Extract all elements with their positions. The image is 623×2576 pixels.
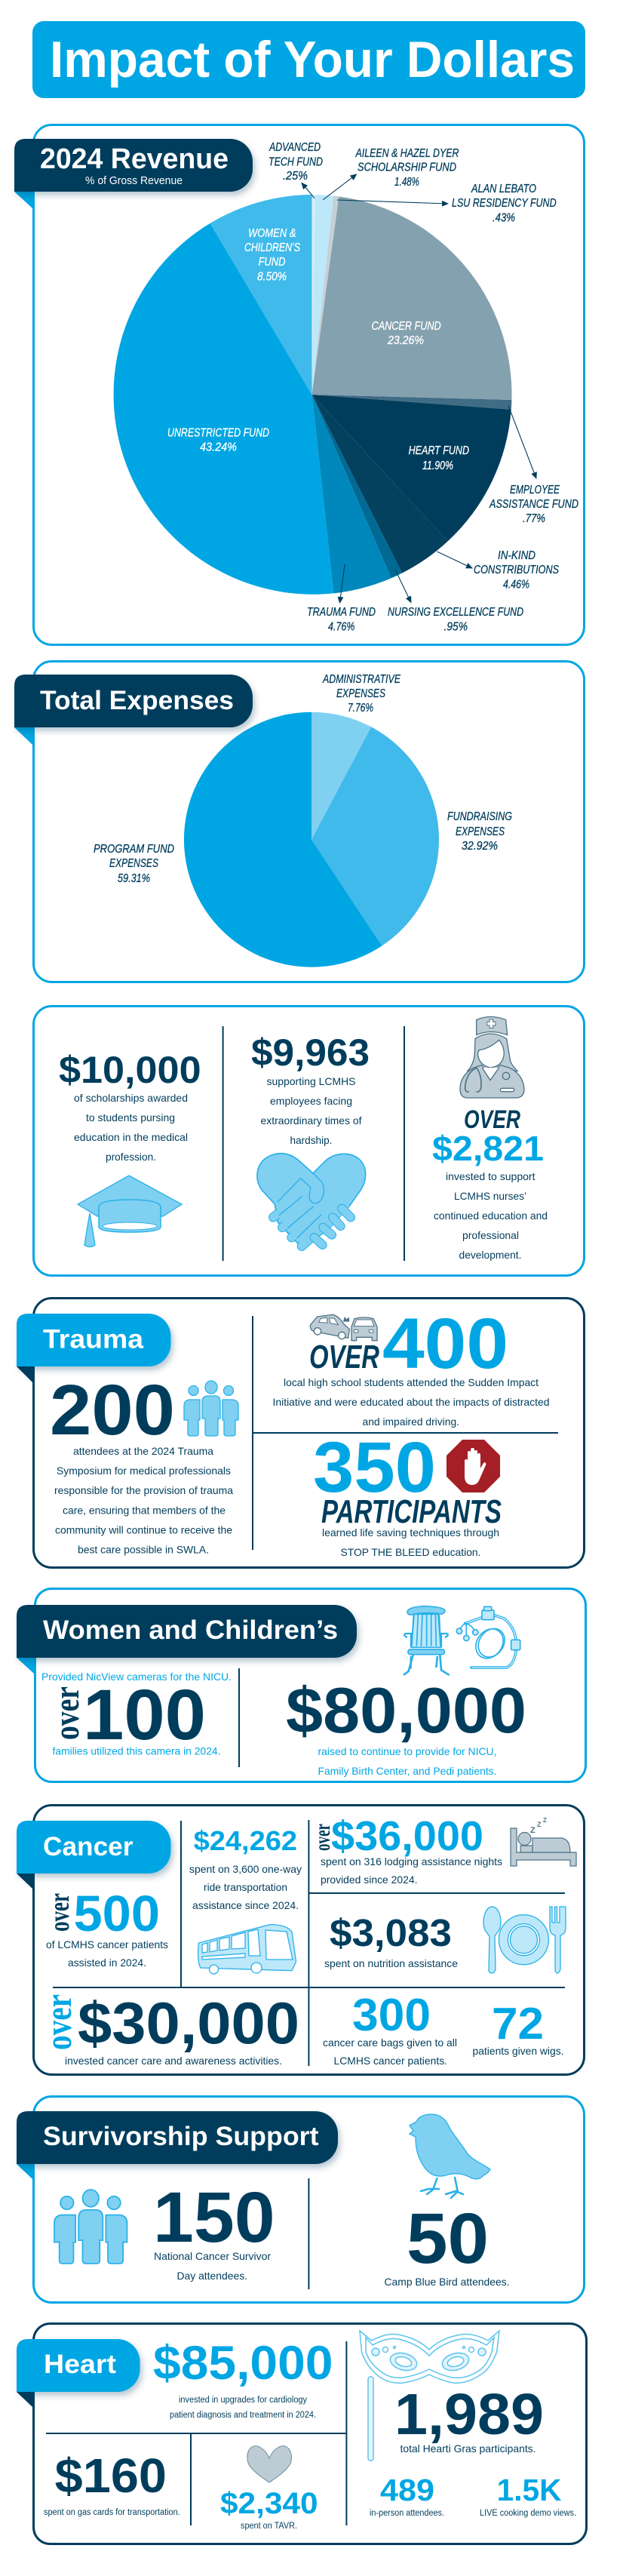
pie labels outside with arrows: ASSISTANCE FUND <box>489 498 578 511</box>
pie labels outside with arrows: TRAUMA FUND <box>307 606 376 619</box>
stat: 489 attendees <box>370 2473 444 2518</box>
stat: 50 camp attendees <box>385 2199 510 2288</box>
stat: 1.5K views <box>480 2473 576 2518</box>
stat: $85,000 upgrades: patient diagnosis and treatment in 2024. <box>170 2411 316 2420</box>
stat: over $36,000 lodging: provided since 2024. <box>321 1874 418 1886</box>
pie labels outside with arrows: ADVANCED <box>269 141 321 154</box>
pie labels outside with arrows: 4.76% <box>328 621 354 634</box>
stat: over $36,000 lodging: over <box>310 1824 335 1851</box>
pie labels: expenses: EXPENSES <box>456 825 505 838</box>
stat: 350 participants: learned life saving techniques through <box>322 1526 499 1539</box>
stat: $9,963 employees: hardship. <box>290 1134 332 1146</box>
panel: scholarships, employees and nurses <box>33 1007 584 1275</box>
icon: person sleeping in bed: Z <box>543 1817 547 1824</box>
stat: 489 attendees: in-person attendees. <box>370 2509 444 2518</box>
pie labels inside slices: 43.24% <box>200 441 237 454</box>
stat: over 100 families: families utilized this camera in 2024. <box>53 1745 220 1757</box>
pie labels outside with arrows: AILEEN & HAZEL DYER <box>355 147 459 160</box>
panel: 2024 revenue <box>14 125 584 644</box>
stat: $24,262 transportation: $24,262 <box>194 1825 297 1856</box>
stat: 1,989 participants: total Hearti Gras participants. <box>400 2442 536 2455</box>
stat: 200 attendees: community will continue to receive the <box>55 1524 232 1536</box>
stat: over 100 families: 100 <box>83 1675 206 1755</box>
stat: $80,000 raised: raised to continue to provide for NICU, <box>318 1745 496 1757</box>
stat: $80,000 raised <box>286 1675 526 1777</box>
stat: $2,340 TAVR: $2,340 <box>220 2487 318 2520</box>
pie labels: expenses: EXPENSES <box>109 857 158 870</box>
stat: over $30,000 invested <box>37 1990 299 2067</box>
pie labels outside with arrows: LSU RESIDENCY FUND <box>452 197 557 210</box>
pie labels inside slices: 8.50% <box>257 270 287 284</box>
heading: Total Expenses <box>14 675 253 745</box>
stat: 200 attendees: 200 <box>50 1370 175 1450</box>
pie labels: expenses: PROGRAM FUND <box>94 843 174 856</box>
stat: $3,083 nutrition: $3,083 <box>330 1911 452 1954</box>
stat: 350 participants: 350 <box>313 1428 436 1508</box>
stat: $10,000 scholarships: to students pursing <box>86 1111 175 1124</box>
stat: 150 attendees: 150 <box>153 2178 275 2258</box>
pie labels inside slices: UNRESTRICTED FUND <box>167 427 269 440</box>
stat: $3,083 nutrition: spent on nutrition assistance <box>324 1957 458 1969</box>
stat: $2,340 TAVR: spent on TAVR. <box>241 2522 297 2531</box>
stat: $24,262 transportation <box>189 1825 302 1911</box>
stat: 300 care bags: cancer care bags given to all <box>323 2037 457 2049</box>
stat: $9,963 employees: employees facing <box>270 1095 352 1107</box>
heading: Survivorship Support: Survivorship Support <box>43 2122 319 2151</box>
icon: person sleeping in bed <box>511 1817 576 1866</box>
stat: $80,000 raised: $80,000 <box>286 1675 526 1747</box>
stat: $9,963 employees: extraordinary times of <box>261 1114 362 1127</box>
stat: over 400 students <box>273 1304 549 1428</box>
title banner <box>32 21 585 98</box>
stat: over $2,821 nurses: $2,821 <box>432 1129 544 1168</box>
pie labels inside slices: HEART FUND <box>409 444 469 457</box>
pie labels inside slices: CHILDREN’S <box>244 241 300 254</box>
icon: group of survivors <box>54 2190 127 2264</box>
pie labels outside with arrows <box>269 141 578 634</box>
icon: car crash <box>310 1314 377 1341</box>
stat: $160 gas cards: $160 <box>55 2448 167 2503</box>
stat: 200 attendees: attendees at the 2024 Trauma <box>73 1445 213 1457</box>
pie labels outside with arrows: SCHOLARSHIP FUND <box>358 161 456 174</box>
icon: plate and cutlery <box>483 1907 566 1973</box>
pie labels outside with arrows: .25% <box>283 170 308 183</box>
pie labels outside with arrows: .77% <box>523 512 545 525</box>
stat: over $30,000 invested: invested cancer care and awareness activities. <box>65 2055 282 2067</box>
stat: 72 wigs <box>472 1999 564 2057</box>
stat: over $2,821 nurses: OVER <box>464 1105 520 1134</box>
stat: 1.5K views: LIVE cooking demo views. <box>480 2509 576 2518</box>
stat: over 500 patients: of LCMHS cancer patients <box>46 1938 168 1950</box>
stat: $80,000 raised: Family Birth Center, and Pedi patients. <box>318 1765 496 1777</box>
icon: person sleeping in bed: Z <box>537 1821 542 1828</box>
stat: $24,262 transportation: spent on 3,600 one-way <box>189 1863 302 1875</box>
stat: 150 attendees: Day attendees. <box>176 2270 247 2282</box>
pie labels: expenses: 7.76% <box>348 702 373 715</box>
stat: $10,000 scholarships <box>59 1049 201 1163</box>
pie labels outside with arrows: TECH FUND <box>269 155 323 168</box>
stat: 300 care bags: LCMHS cancer patients. <box>333 2055 447 2067</box>
stat: $160 gas cards: spent on gas cards for transportation. <box>44 2508 180 2517</box>
pie labels inside slices: FUND <box>258 256 286 269</box>
heading: Trauma: Trauma <box>43 1325 144 1354</box>
panel: cancer <box>17 1805 584 2075</box>
stat: 200 attendees: best care possible in SWLA. <box>78 1544 209 1556</box>
stat: over $2,821 nurses <box>432 1105 548 1261</box>
panel: survivorship support <box>17 2096 584 2303</box>
stat: 350 participants: PARTICIPANTS <box>321 1493 502 1530</box>
panel: women and children's <box>17 1589 585 1782</box>
pie labels: expenses: EXPENSES <box>336 687 385 700</box>
heading: 2024 Revenue: 2024 Revenue <box>40 143 229 175</box>
pie labels: expenses <box>94 673 512 885</box>
stat: $10,000 scholarships: education in the medical <box>74 1131 188 1143</box>
heading: Cancer: Cancer <box>43 1832 134 1861</box>
stat: 200 attendees: responsible for the provision of trauma <box>54 1484 233 1496</box>
stat: over 100 families <box>41 1671 232 1757</box>
stat: over $2,821 nurses: LCMHS nurses’ <box>454 1190 526 1202</box>
heading: Cancer <box>17 1821 170 1889</box>
pie labels inside slices: WOMEN & <box>248 227 296 240</box>
heading: Survivorship Support <box>17 2111 338 2179</box>
title: Impact of Your Dollars <box>50 31 575 88</box>
pie labels: expenses: FUNDRAISING <box>447 810 512 823</box>
pie labels outside with arrows: CONSTRIBUTIONS <box>474 564 559 576</box>
stat: over 500 patients: 500 <box>74 1886 160 1942</box>
stat: $85,000 upgrades: $85,000 <box>153 2337 333 2390</box>
panel: total expenses <box>14 661 584 982</box>
heading: Total Expenses: Total Expenses <box>40 686 234 715</box>
stat: $10,000 scholarships: profession. <box>106 1151 156 1163</box>
icon: baby mobile <box>456 1606 520 1668</box>
icon: stop sign with hand <box>447 1440 500 1492</box>
stat: $24,262 transportation: assistance since 2024. <box>192 1899 299 1911</box>
pie labels outside with arrows: .95% <box>443 621 468 634</box>
pie labels inside slices: CANCER FUND <box>372 320 441 333</box>
stat: $10,000 scholarships: of scholarships awarded <box>74 1092 188 1104</box>
stat: over $2,821 nurses: continued education and <box>434 1210 548 1222</box>
pie labels outside with arrows: EMPLOYEE <box>510 484 560 496</box>
pie labels outside with arrows: .43% <box>493 211 515 225</box>
stat: over 500 patients: over <box>44 1893 75 1932</box>
stat: over $2,821 nurses: development. <box>459 1249 522 1261</box>
pie labels inside slices: 23.26% <box>387 334 424 347</box>
icon: mardi gras mask <box>360 2331 499 2461</box>
stat: 50 camp attendees: 50 <box>407 2199 489 2279</box>
icon: handshake heart <box>257 1154 366 1247</box>
pie labels inside slices: 11.90% <box>422 460 453 472</box>
pie labels inside slices <box>167 227 469 472</box>
stat: over 100 families: Provided NicView cameras for the NICU. <box>41 1671 232 1683</box>
stat: over 500 patients: assisted in 2024. <box>68 1957 146 1969</box>
stat: 1,989 participants: 1,989 <box>394 2382 544 2447</box>
stat: over $36,000 lodging: spent on 316 lodging assistance nights <box>321 1855 502 1867</box>
stat: over $2,821 nurses: professional <box>462 1229 519 1241</box>
icon: graduation cap <box>78 1176 182 1247</box>
stat: over 100 families: over <box>47 1686 87 1740</box>
icon: person sleeping in bed: Z <box>530 1826 536 1835</box>
icon: grey heart <box>247 2446 291 2482</box>
icon: group of people <box>184 1381 238 1436</box>
stat: $9,963 employees <box>251 1031 370 1146</box>
stat: over $30,000 invested: $30,000 <box>78 1990 299 2056</box>
stat: $24,262 transportation: ride transportation <box>204 1881 287 1893</box>
stat: 350 participants: STOP THE BLEED education. <box>341 1546 481 1558</box>
stat: $9,963 employees: supporting LCMHS <box>267 1075 356 1087</box>
stat: $9,963 employees: $9,963 <box>251 1031 370 1074</box>
pie labels outside with arrows: IN-KIND <box>498 549 536 562</box>
stat: 150 attendees: National Cancer Survivor <box>154 2250 271 2262</box>
heading: Women and Children's <box>17 1605 357 1674</box>
stat: over $2,821 nurses: invested to support <box>446 1170 536 1182</box>
heading: Trauma <box>17 1314 170 1382</box>
icon: blue bird <box>410 2114 490 2198</box>
pie labels: expenses: ADMINISTRATIVE <box>322 673 400 686</box>
panel: heart <box>17 2324 587 2544</box>
stat: over 400 students: 400 <box>382 1304 508 1384</box>
stat: 200 attendees: Symposium for medical professionals <box>57 1465 231 1477</box>
stat: 72 wigs: 72 <box>492 1999 544 2049</box>
stat: $85,000 upgrades <box>153 2337 333 2420</box>
stat: over $36,000 lodging <box>310 1812 502 1886</box>
stat: 200 attendees: care, ensuring that members of the <box>63 1505 226 1517</box>
pie labels outside with arrows: 1.48% <box>394 176 419 189</box>
stat: over 400 students: Initiative and were educated about the impacts of distracted <box>273 1396 549 1408</box>
stat: 489 attendees: 489 <box>380 2473 434 2507</box>
icon: rocking chair <box>404 1606 450 1675</box>
stat: $160 gas cards <box>44 2448 180 2517</box>
panel: trauma <box>17 1298 584 1568</box>
heading: Women and Children's: Women and Children’s <box>43 1615 338 1645</box>
pie labels outside with arrows: 4.46% <box>503 578 529 592</box>
pie labels: expenses: 32.92% <box>462 840 498 853</box>
stat: $10,000 scholarships: $10,000 <box>59 1049 201 1091</box>
stat: 350 participants <box>313 1428 502 1558</box>
pie chart: revenue <box>114 195 512 595</box>
heading: 2024 Revenue: % of Gross Revenue <box>85 174 183 187</box>
stat: $85,000 upgrades: invested in upgrades for cardiology <box>179 2396 307 2405</box>
pie labels: expenses: 59.31% <box>118 872 150 885</box>
pie chart: expenses <box>184 712 439 967</box>
stat: 1.5K views: 1.5K <box>497 2473 562 2507</box>
stat: 300 care bags <box>323 1990 457 2067</box>
heading: Heart: Heart <box>44 2350 116 2379</box>
icon: bus <box>198 1925 296 1974</box>
stat: 50 camp attendees: Camp Blue Bird attendees. <box>385 2276 510 2288</box>
pie labels outside with arrows: NURSING EXCELLENCE FUND <box>388 606 523 619</box>
stat: over 400 students: OVER <box>309 1339 379 1376</box>
icon: nurse <box>460 1016 524 1098</box>
stat: over 400 students: and impaired driving. <box>362 1416 459 1428</box>
stat: over $30,000 invested: over <box>37 1994 79 2050</box>
stat: 200 attendees <box>50 1370 233 1556</box>
heading: 2024 Revenue <box>14 139 253 208</box>
stat: 72 wigs: patients given wigs. <box>472 2045 564 2057</box>
heading: Heart <box>17 2339 140 2407</box>
stat: over $36,000 lodging: $36,000 <box>331 1812 483 1859</box>
stat: over 400 students: local high school students attended the Sudden Impact <box>284 1376 539 1388</box>
stat: over 500 patients <box>44 1886 168 1969</box>
stat: $3,083 nutrition <box>324 1911 458 1969</box>
pie labels outside with arrows: ALAN LEBATO <box>471 183 536 195</box>
stat: 300 care bags: 300 <box>352 1990 431 2040</box>
